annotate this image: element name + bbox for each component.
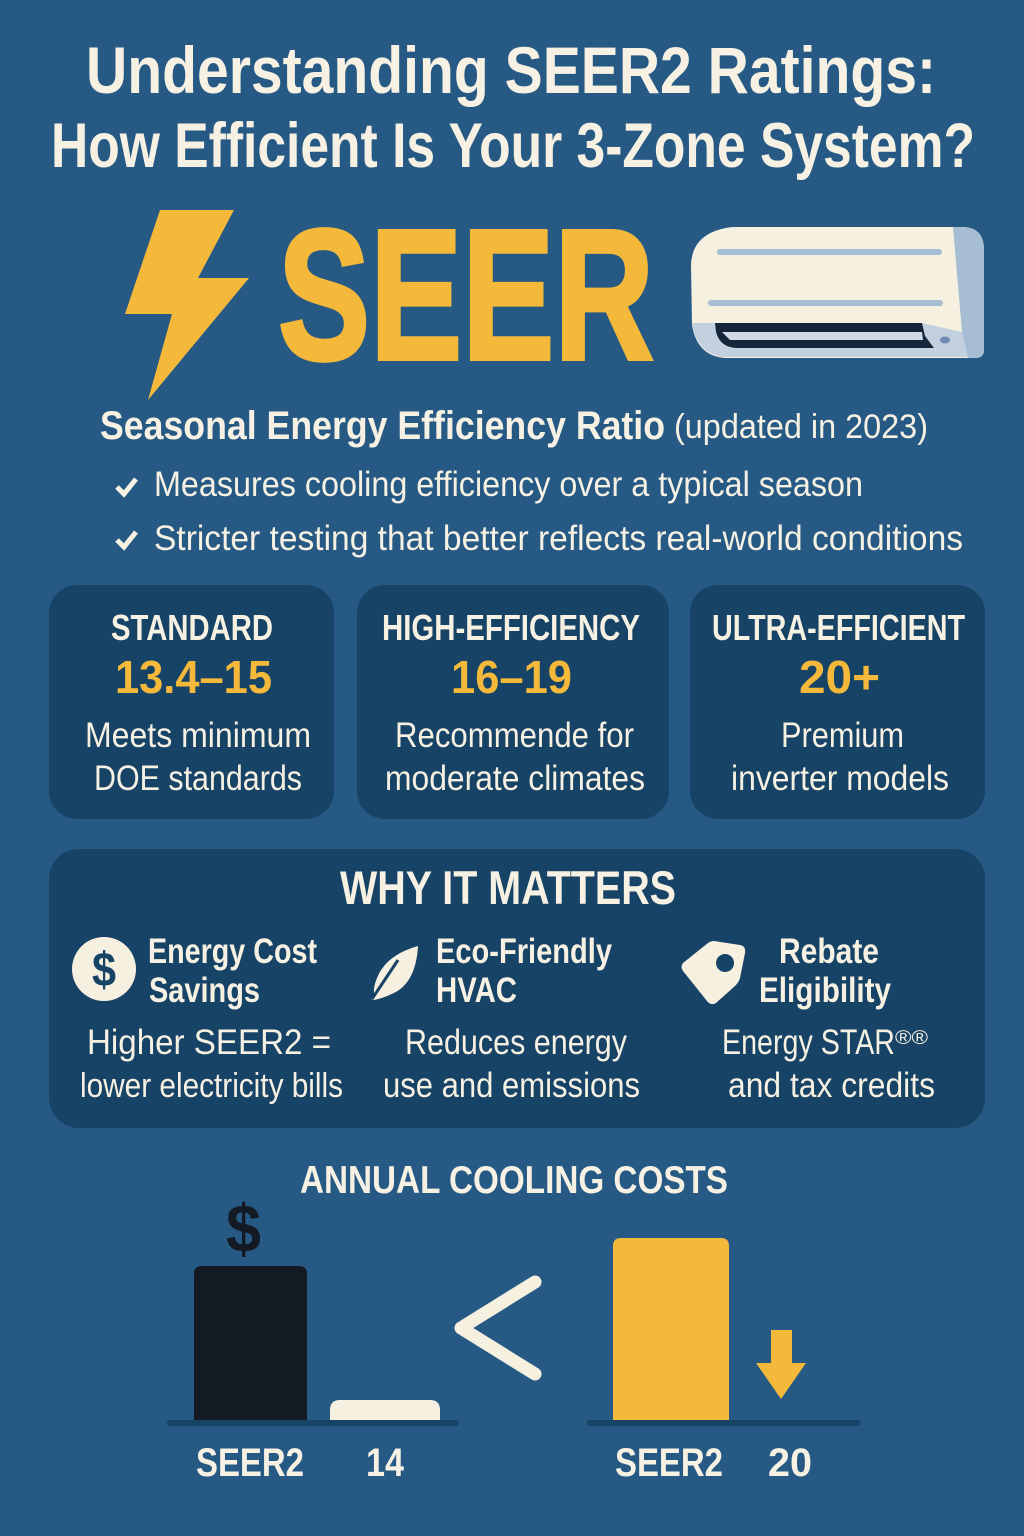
label: SEER2 14: 14 — [366, 1441, 405, 1485]
bar: cream — [330, 1400, 440, 1420]
item: eco-friendly hvac: Eco-Friendly — [436, 932, 612, 971]
bullet list — [117, 465, 963, 558]
icon: down arrow — [756, 1330, 806, 1399]
SEER heading: SEER — [278, 192, 654, 399]
panel: ultra-efficient: Premium — [781, 716, 904, 755]
item: eco-friendly hvac: use and emissions — [383, 1066, 640, 1105]
icon: less-than symbol — [461, 1282, 535, 1374]
subtitle: (updated in 2023) — [674, 408, 928, 446]
item: energy cost savings: lower electricity bills — [80, 1067, 343, 1105]
item: energy cost savings — [80, 932, 343, 1105]
item: rebate eligibility: Rebate — [779, 932, 879, 971]
item: eco-friendly hvac — [383, 932, 640, 1105]
bar: yellow — [613, 1238, 729, 1420]
label: SEER2 14: SEER2 — [196, 1441, 304, 1485]
icon: price tag — [682, 941, 745, 1004]
bar: dark — [194, 1266, 307, 1420]
panel: ultra-efficient: ULTRA-EFFICIENT — [712, 607, 965, 648]
label: SEER2 20 — [615, 1441, 812, 1485]
bullet text 1: Measures cooling efficiency over a typical season — [154, 465, 863, 504]
panel: standard: STANDARD — [111, 607, 273, 648]
panel: high-efficiency: moderate climates — [385, 759, 645, 798]
title — [51, 33, 975, 181]
icon: lightning bolt — [125, 210, 249, 400]
panel: high-efficiency: HIGH-EFFICIENCY — [382, 607, 640, 648]
heading: annual cooling costs: ANNUAL COOLING COSTS — [300, 1159, 728, 1202]
panel: why it matters — [49, 849, 985, 1128]
heading: why it matters: WHY IT MATTERS — [340, 861, 676, 914]
panel: ultra-efficient — [690, 585, 985, 819]
subtitle: Seasonal Energy Efficiency Ratio — [100, 404, 665, 448]
item: rebate eligibility — [722, 932, 935, 1105]
bullet text 2: Stricter testing that better reflects real-world conditions — [154, 519, 963, 558]
label: SEER2 20: 20 — [768, 1441, 812, 1485]
panel: high-efficiency: 16–19 — [451, 651, 572, 703]
icon: dollar circle — [72, 937, 136, 1001]
chart: SEER2 20 — [587, 1238, 860, 1485]
label: SEER2 20: SEER2 — [615, 1441, 723, 1485]
item: energy cost savings: Energy Cost — [148, 932, 317, 971]
panel: ultra-efficient: inverter models — [731, 759, 949, 798]
item: eco-friendly hvac: HVAC — [436, 971, 517, 1010]
chart: SEER2 14 — [167, 1191, 459, 1485]
icon: dollar circle: $ — [92, 944, 116, 997]
item: rebate eligibility: Energy STAR — [722, 1023, 895, 1062]
item: rebate eligibility: Eligibility — [759, 971, 891, 1010]
item: eco-friendly hvac: Reduces energy — [405, 1023, 627, 1062]
icon: leaf — [371, 946, 418, 1000]
panel: standard: DOE standards — [94, 759, 302, 798]
item: energy cost savings: Savings — [149, 971, 260, 1010]
item: rebate eligibility: and tax credits — [728, 1066, 935, 1105]
item: energy cost savings: Higher SEER2 = — [87, 1023, 331, 1062]
icon: air conditioner — [691, 227, 984, 358]
item: rebate eligibility: ®® — [895, 1028, 928, 1049]
icon: check 1 — [117, 479, 136, 494]
icon: check 2 — [117, 532, 136, 547]
label: SEER2 14 — [196, 1441, 405, 1485]
panel: standard: Meets minimum — [85, 716, 311, 755]
panel: high-efficiency: Recommende for — [395, 716, 634, 755]
panel: high-efficiency — [357, 585, 669, 819]
panel: ultra-efficient: 20+ — [799, 651, 880, 703]
panel: standard: 13.4–15 — [115, 651, 272, 703]
panel: standard — [49, 585, 334, 819]
icon: dollar sign: $ — [226, 1191, 261, 1267]
